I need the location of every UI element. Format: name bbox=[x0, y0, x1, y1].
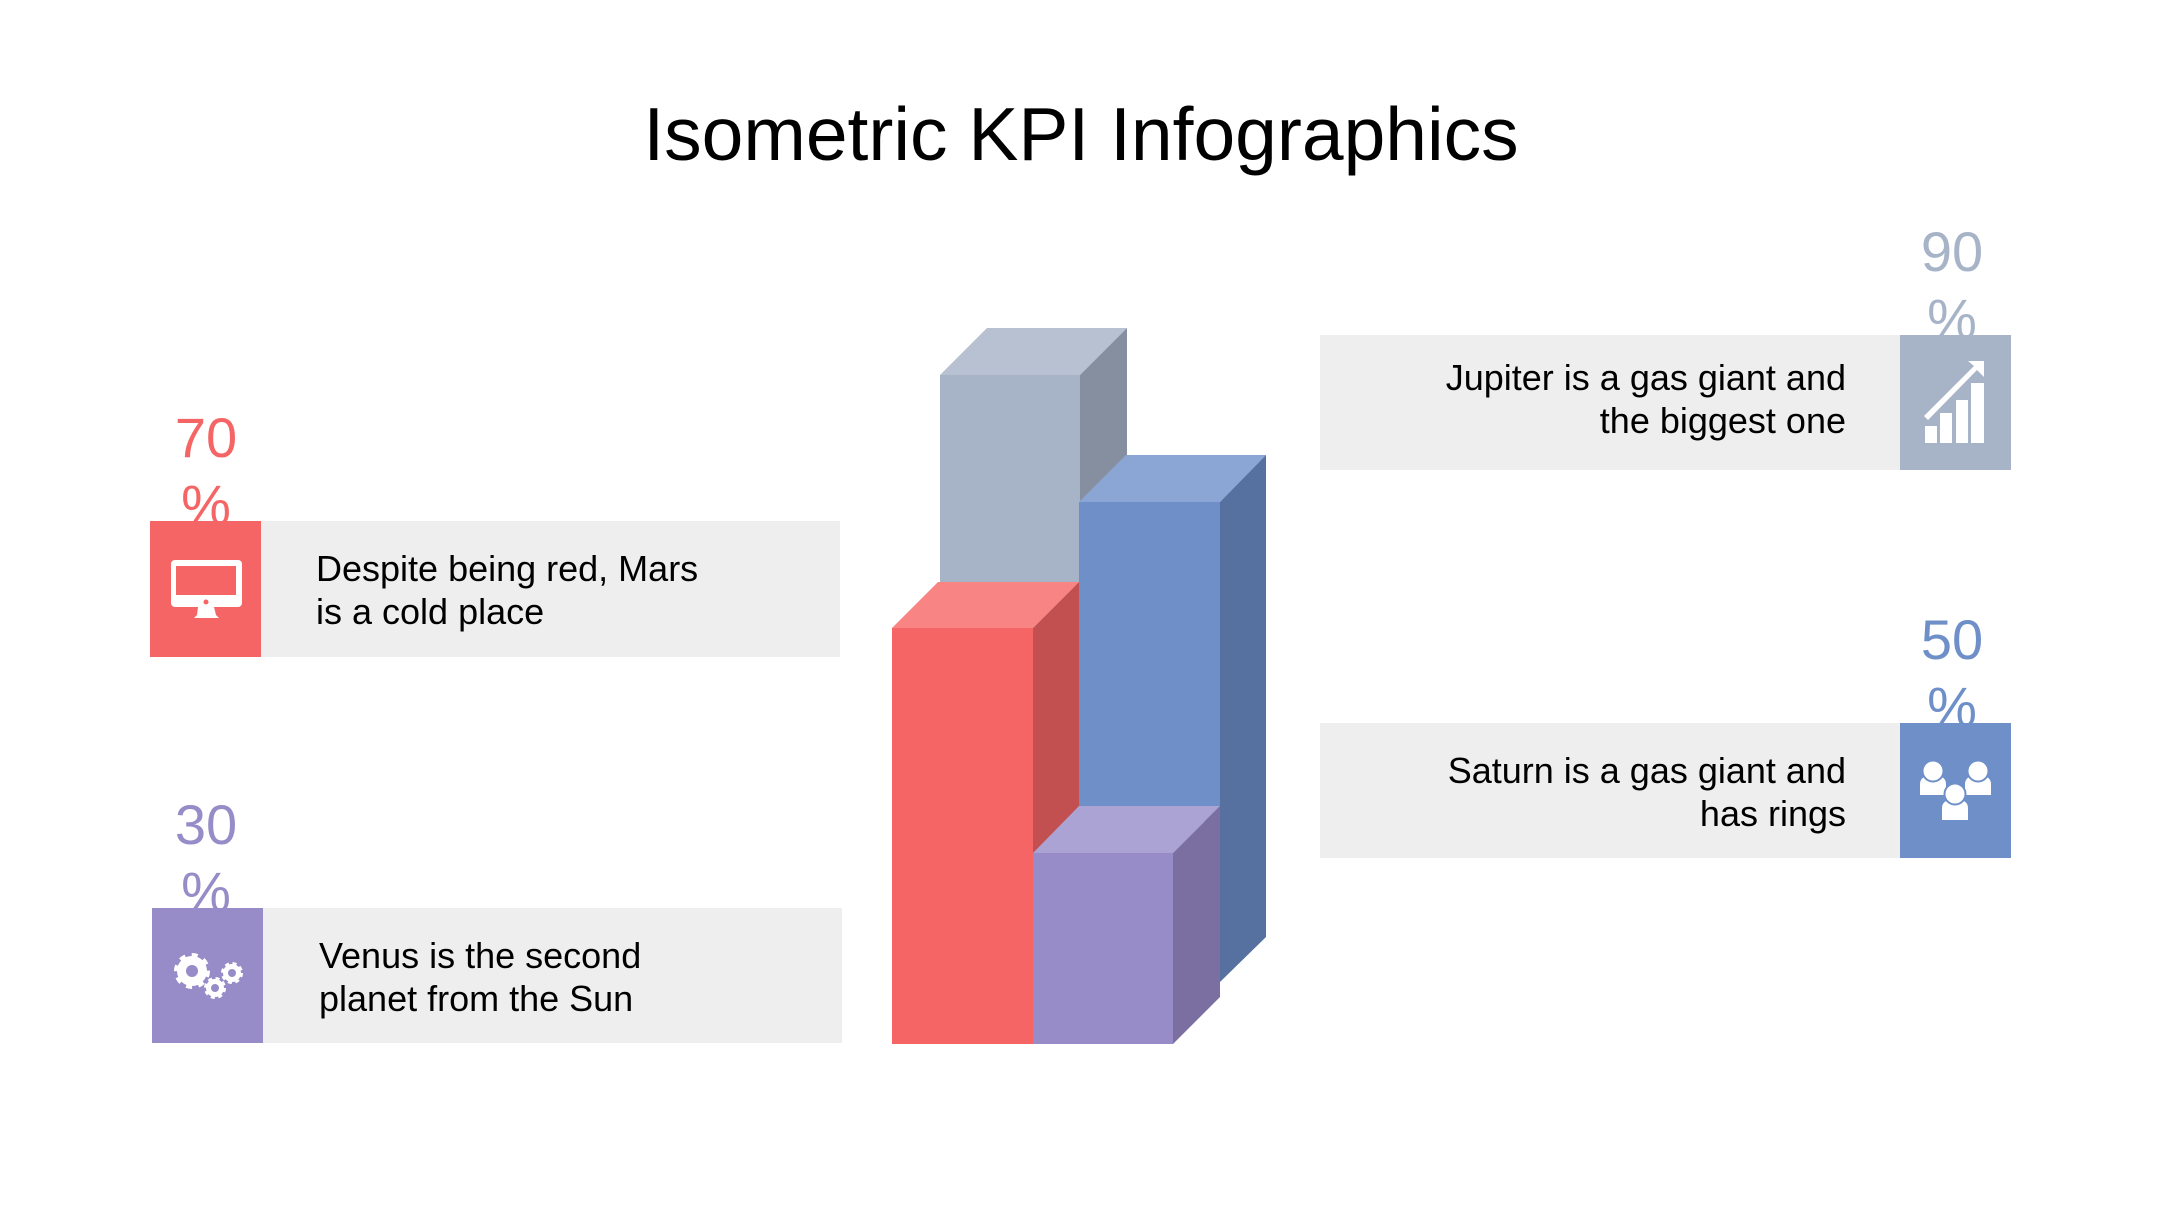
value: 30%: % bbox=[181, 860, 231, 923]
panel: Saturn bbox=[1320, 608, 2011, 858]
panel: Jupiter bbox=[1320, 220, 2011, 470]
text: Venus: Venus is the second bbox=[319, 935, 641, 976]
bar: Saturn 50% bbox=[1079, 455, 1266, 982]
text: Mars: is a cold place bbox=[316, 591, 544, 632]
panel: Venus bbox=[152, 793, 842, 1043]
icon: rising chart bbox=[1924, 361, 1984, 443]
title: Isometric KPI Infographics bbox=[643, 92, 1519, 176]
value: 90%: 90 bbox=[1921, 220, 1983, 283]
text: Saturn: Saturn is a gas giant and bbox=[1448, 750, 1846, 791]
value: 90%: % bbox=[1927, 287, 1977, 350]
value: 30%: 30 bbox=[175, 793, 237, 856]
panel: Mars bbox=[150, 406, 840, 657]
text: Saturn: has rings bbox=[1700, 793, 1846, 834]
icon: gears bbox=[176, 955, 242, 998]
value: 70%: % bbox=[181, 473, 231, 536]
bar: Jupiter 90% bbox=[940, 328, 1127, 585]
value: 70%: 70 bbox=[175, 406, 237, 469]
isometric bar chart bbox=[892, 328, 1266, 1044]
text: Venus: planet from the Sun bbox=[319, 978, 633, 1019]
icon: people bbox=[1920, 760, 1991, 820]
text: Jupiter: the biggest one bbox=[1600, 400, 1846, 441]
bar: Venus 30% bbox=[1033, 806, 1220, 1044]
value: 50%: 50 bbox=[1921, 608, 1983, 671]
bar: Mars 70% bbox=[892, 582, 1079, 1044]
icon: monitor bbox=[171, 560, 242, 618]
text: Jupiter: Jupiter is a gas giant and bbox=[1446, 357, 1846, 398]
text: Mars: Despite being red, Mars bbox=[316, 548, 698, 589]
value: 50%: % bbox=[1927, 675, 1977, 738]
